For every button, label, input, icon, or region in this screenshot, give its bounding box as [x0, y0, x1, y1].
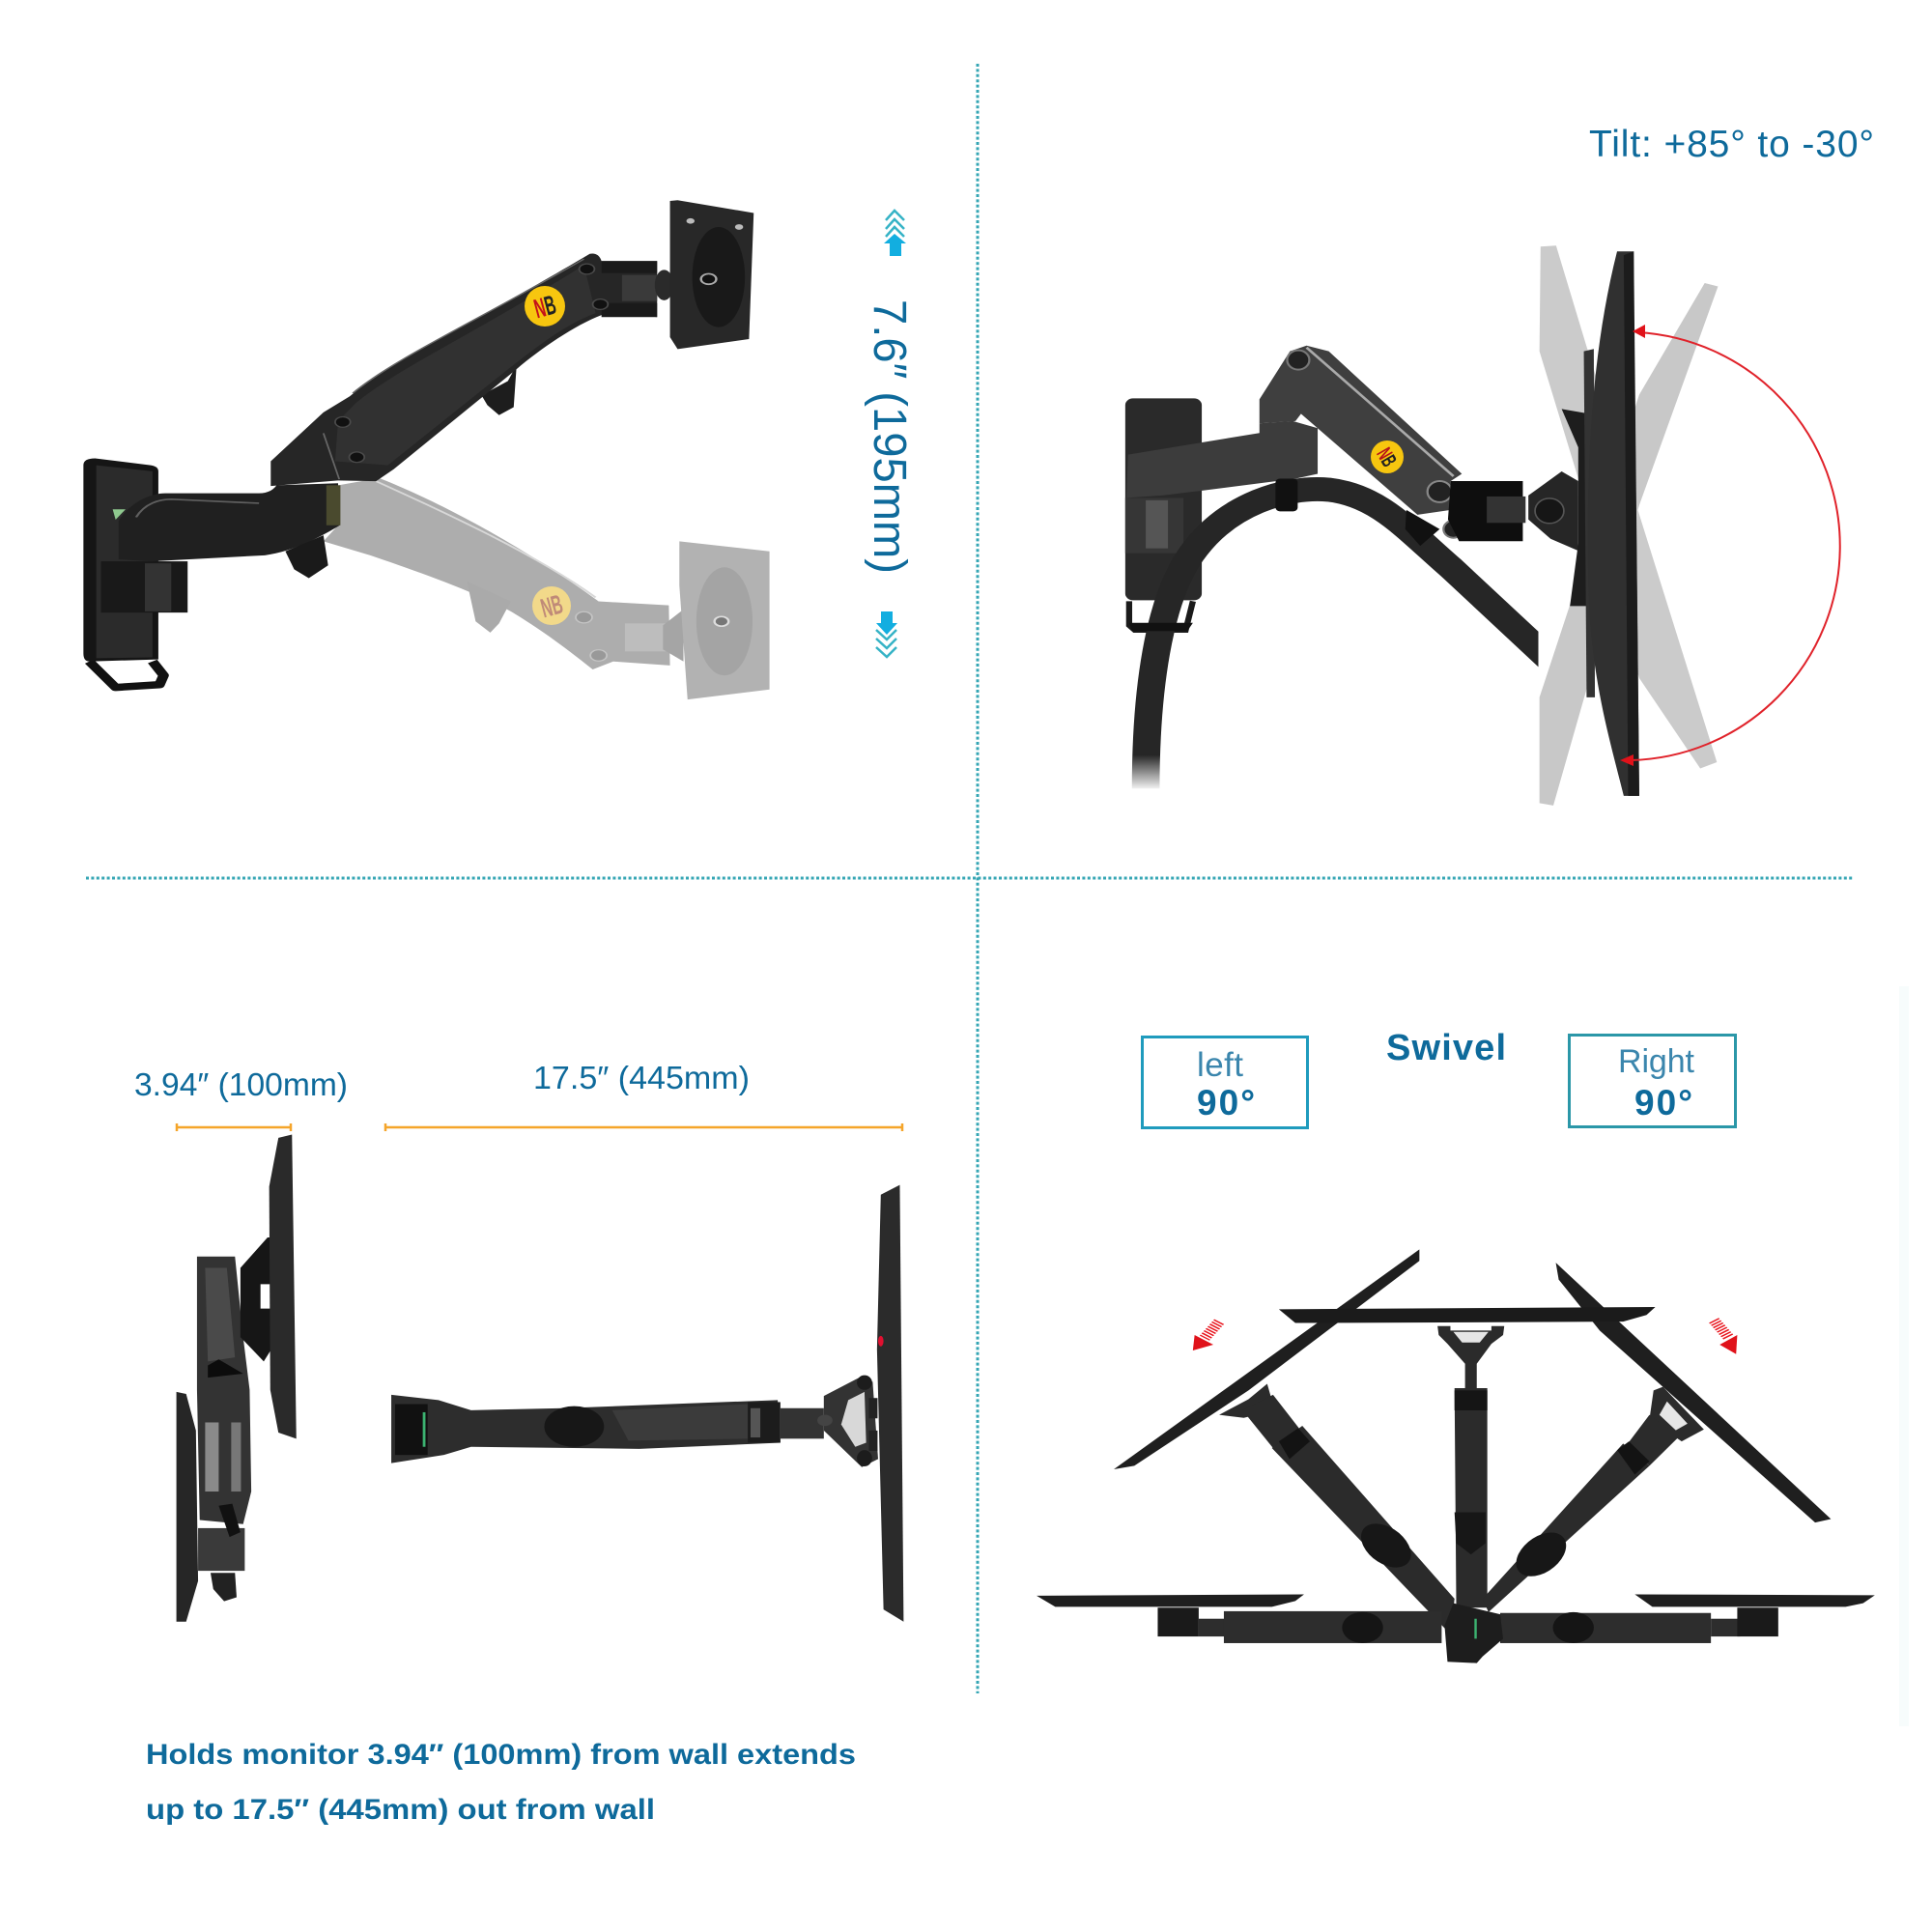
callout: right 90 degrees: Right	[1618, 1043, 1695, 1080]
text block: extension summary: up to 17.5″ (445mm) out from wall	[146, 1794, 655, 1826]
label: height range: 7.6″ (195mm)	[864, 299, 915, 574]
arrow: swivel right	[1714, 1321, 1737, 1354]
heading: swivel: Swivel	[1386, 1028, 1506, 1068]
callout: left 90 degrees: 90°	[1197, 1083, 1255, 1122]
dimension bar: extended	[385, 1123, 902, 1131]
illustration: arm fully extended	[391, 1185, 903, 1622]
arrow: swivel left	[1193, 1321, 1219, 1350]
icon: down arrow	[876, 611, 897, 657]
panel: extension distances	[134, 1060, 903, 1826]
illustration: ghost tilted monitors	[1540, 245, 1718, 806]
illustration: side view of arm with monitor	[1125, 251, 1639, 796]
callout: right 90 degrees: 90°	[1634, 1083, 1692, 1122]
label: extended distance: 17.5″ (445mm)	[533, 1060, 750, 1095]
panel: tilt	[1125, 124, 1874, 806]
illustration: top view swivel positions	[1037, 1249, 1875, 1663]
logo: NB badge: NB	[530, 290, 559, 324]
arrow: tilt arc	[1620, 325, 1840, 766]
label: retracted distance: 3.94″ (100mm)	[134, 1066, 348, 1102]
illustration: arm folded against wall	[177, 1134, 297, 1622]
icon: up arrow	[884, 211, 906, 256]
dimension bar: retracted	[177, 1123, 291, 1131]
text block: extension summary	[146, 1739, 856, 1826]
callout: right 90 degrees	[1569, 1036, 1735, 1126]
illustration: raised black arm	[83, 200, 753, 688]
callout: left 90 degrees: left	[1197, 1046, 1243, 1084]
panel: height adjustment	[83, 200, 915, 699]
logo: NB badge faded	[532, 586, 571, 625]
logo: NB badge: NB	[1372, 443, 1402, 470]
text block: extension summary: Holds monitor 3.94″ (100mm) from wall extends	[146, 1739, 856, 1771]
logo: NB badge faded: NB	[537, 589, 566, 623]
illustration: lowered arm ghost	[324, 478, 770, 699]
heading: tilt range: Tilt: +85° to -30°	[1589, 124, 1874, 165]
callout: left 90 degrees	[1142, 1037, 1308, 1128]
panel: swivel	[1037, 1028, 1875, 1663]
